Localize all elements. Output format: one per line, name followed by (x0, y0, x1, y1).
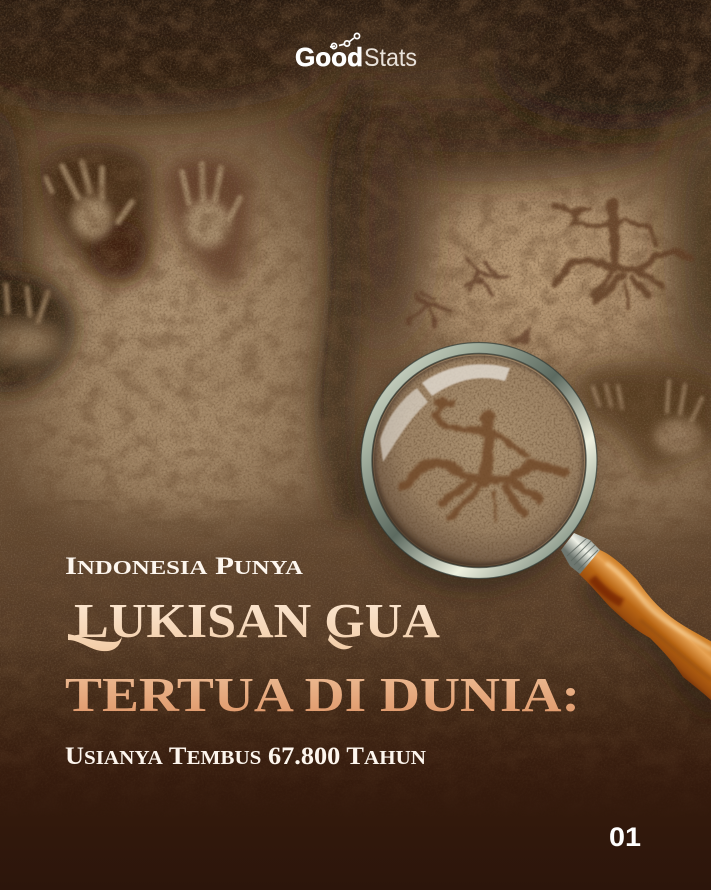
page number: 01 (609, 822, 641, 852)
painted small figure: centre (465, 258, 508, 296)
painted mark above lens (505, 326, 530, 344)
vertical crack down the cave wall (314, 80, 376, 520)
wooden handle (579, 550, 711, 701)
swash under L and G (68, 634, 353, 651)
metal collar (561, 533, 600, 574)
painted small figure: left of centre (408, 292, 450, 325)
logo chart line icon (330, 33, 360, 49)
logo: GoodStats: Good (295, 42, 363, 72)
logo: GoodStats (295, 33, 417, 72)
heading line 1: LUKISAN GUA (74, 593, 441, 648)
heading line 2: TERTUA DI DUNIA: (65, 667, 580, 722)
hand stencil: lower left (0, 270, 75, 392)
hand stencil: upper middle (164, 156, 251, 285)
magnifying glass (354, 342, 711, 725)
subtitle: USIANYA TEMBUS 67.800 T AHUN (65, 743, 427, 770)
hand stencil: upper left (38, 142, 154, 280)
painted figure: archer on right (553, 199, 690, 308)
logo: GoodStats: Stats (364, 44, 417, 72)
magnified figure in lens (403, 400, 565, 522)
hand stencils: right (578, 368, 711, 470)
shadow of magnifier (354, 357, 711, 725)
magnifier ring (361, 342, 597, 578)
lens highlight (422, 364, 510, 396)
lens (370, 350, 590, 570)
text: kicker: INDONESIA P UNYA (65, 553, 304, 580)
